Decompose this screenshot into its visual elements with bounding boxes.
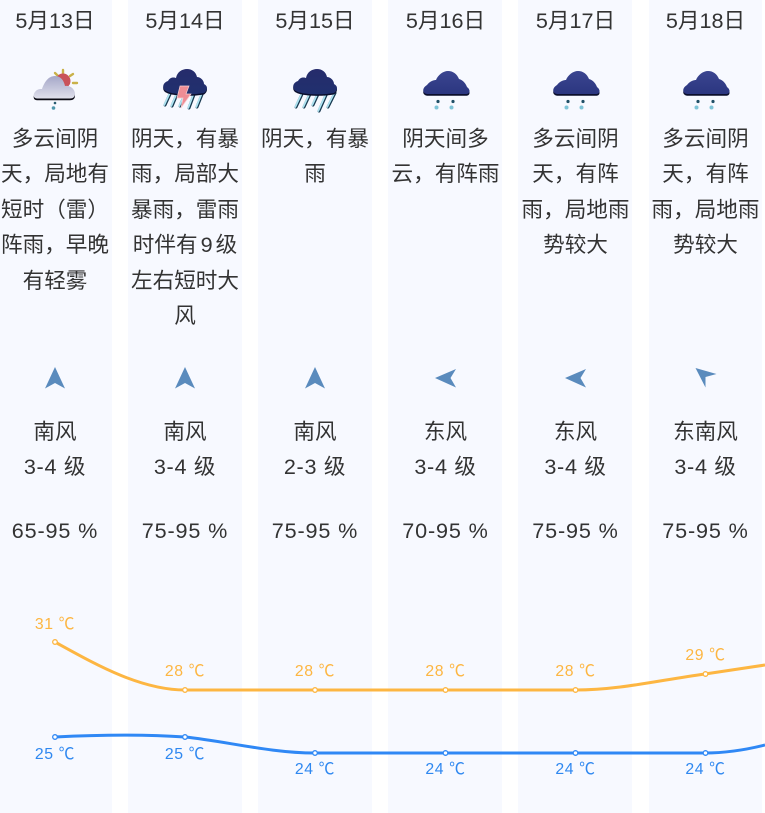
wind: May 13 <box>24 419 86 478</box>
high temperature line <box>53 640 765 692</box>
humidity: May 13: 65-95 % <box>12 518 98 543</box>
weather description: May 16: 阴天间多 <box>402 126 489 151</box>
weather description: May 17: 势较大 <box>543 232 608 257</box>
wind: May 15: 南风 <box>293 419 337 444</box>
date: May 17: 5月17日 <box>536 8 615 33</box>
weather description: May 14: 左右短时大 <box>131 268 239 293</box>
high temperature labels: 28 ℃ <box>555 663 596 680</box>
date: May 14: 5月14日 <box>145 8 225 33</box>
low temperature labels: 24 ℃ <box>295 761 335 778</box>
low temperature labels <box>35 746 726 778</box>
weather description: May 13: 短时（雷） <box>1 197 109 222</box>
weather description: May 14: 暴雨，雷雨 <box>131 197 239 222</box>
low temperature labels: 24 ℃ <box>555 761 596 778</box>
low temperature labels: 25 ℃ <box>165 746 205 763</box>
panel: May 13 <box>0 0 112 813</box>
icon: heavy rain <box>293 69 337 112</box>
wind: May 18 <box>673 419 738 478</box>
date: May 18: 5月18日 <box>666 8 745 33</box>
humidity: May 16: 70-95 % <box>402 518 489 543</box>
wind: May 18: 东南风 <box>673 419 738 444</box>
weather description: May 17: 雨，局地雨 <box>522 197 629 222</box>
weather description: May 18: 多云间阴 <box>662 126 749 151</box>
low temperature labels: 25 ℃ <box>35 746 75 763</box>
arrow: east wind <box>565 369 586 388</box>
weather description: May 13: 天，局地有 <box>1 161 109 186</box>
weather description: May 18: 势较大 <box>673 232 738 257</box>
wind: May 16: 3-4 级 <box>414 454 477 478</box>
weather description: May 14: 时伴有9级 <box>133 232 237 257</box>
wind: May 14 <box>154 419 216 478</box>
wind: May 15 <box>284 419 346 478</box>
wind: May 13: 3-4 级 <box>24 454 86 478</box>
high temperature labels: 28 ℃ <box>165 663 205 680</box>
humidity: May 15: 75-95 % <box>272 518 358 543</box>
icon: thunderstorm <box>163 69 207 110</box>
wind: May 17: 东风 <box>554 419 597 444</box>
panel: May 14 <box>128 0 242 813</box>
arrow: south wind <box>45 367 65 388</box>
wind: May 16 <box>414 419 477 478</box>
humidity: May 14: 75-95 % <box>142 518 228 543</box>
weather description: May 14: 阴天，有暴 <box>131 126 239 151</box>
weather description: May 18 <box>652 126 759 257</box>
weather description: May 18: 天，有阵 <box>662 161 749 186</box>
wind: May 14: 3-4 级 <box>154 454 216 478</box>
weather description: May 13 <box>1 126 109 293</box>
panel: May 15 <box>258 0 372 813</box>
humidity: May 18: 75-95 % <box>662 518 749 543</box>
wind: May 16: 东风 <box>424 419 467 444</box>
panel: May 18 <box>649 0 762 813</box>
arrow: southeast wind <box>696 368 716 388</box>
wind: May 17: 3-4 级 <box>544 454 607 478</box>
weather description: May 18: 雨，局地雨 <box>652 197 759 222</box>
wind: May 13: 南风 <box>33 419 77 444</box>
date: May 15: 5月15日 <box>275 8 355 33</box>
panel: May 16 <box>388 0 502 813</box>
wind: May 15: 2-3 级 <box>284 454 346 478</box>
weather description: May 16 <box>392 126 499 186</box>
arrow: south wind <box>175 367 195 388</box>
wind: May 18: 3-4 级 <box>674 454 737 478</box>
weather description: May 15 <box>261 126 369 186</box>
weather description: May 16: 云，有阵雨 <box>392 161 499 186</box>
weather description: May 13: 有轻雾 <box>23 268 87 293</box>
weather description: May 14: 雨，局部大 <box>131 161 239 186</box>
arrow: east wind <box>435 369 456 388</box>
icon: showers <box>423 71 470 110</box>
low temperature labels: 24 ℃ <box>685 761 726 778</box>
panel: May 17 <box>518 0 632 813</box>
low temperature labels: 24 ℃ <box>425 761 466 778</box>
weather description: May 13: 多云间阴 <box>12 126 98 151</box>
weather description: May 14 <box>131 126 239 328</box>
icon: showers <box>553 71 600 110</box>
icon: cloudy with sun and light rain <box>34 68 78 110</box>
wind: May 17 <box>544 419 607 478</box>
weather description: May 17: 天，有阵 <box>532 161 619 186</box>
weather description: May 17 <box>522 126 629 257</box>
weather description: May 15: 雨 <box>304 161 326 186</box>
high temperature labels: 29 ℃ <box>685 647 726 664</box>
high temperature labels: 28 ℃ <box>425 663 466 680</box>
date: May 13: 5月13日 <box>15 8 95 33</box>
humidity: May 17: 75-95 % <box>532 518 619 543</box>
weather description: May 14: 风 <box>174 303 196 328</box>
high temperature labels: 28 ℃ <box>295 663 335 680</box>
weather description: May 13: 阵雨，早晚 <box>1 232 109 257</box>
high temperature labels: 31 ℃ <box>35 616 75 633</box>
date: May 16: 5月16日 <box>406 8 485 33</box>
weather description: May 15: 阴天，有暴 <box>261 126 369 151</box>
weather description: May 17: 多云间阴 <box>532 126 619 151</box>
high temperature labels <box>35 616 726 680</box>
arrow: south wind <box>305 367 325 388</box>
icon: showers <box>683 71 730 110</box>
low temperature line <box>53 735 765 755</box>
wind: May 14: 南风 <box>163 419 207 444</box>
